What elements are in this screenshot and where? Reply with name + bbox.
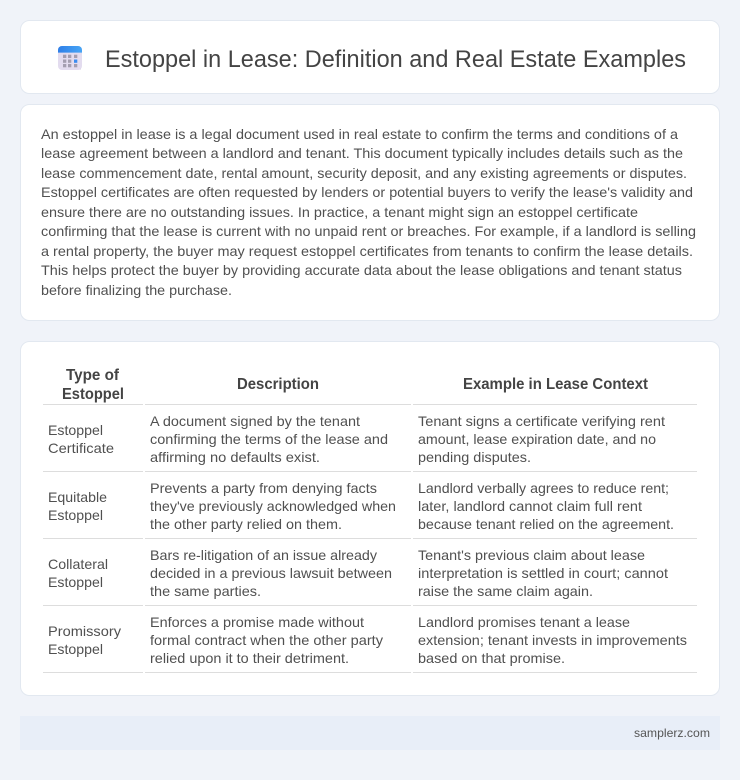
- table row: equitable estoppel: they've previously acknowledged when: [150, 498, 396, 514]
- table row: collateral estoppel: Tenant's previous claim about lease: [418, 547, 645, 563]
- table row: equitable estoppel: Prevents a party from denying facts: [150, 480, 377, 496]
- table row: collateral estoppel: decided in a previous lawsuit between: [150, 565, 392, 581]
- text block: paragraph: [41, 126, 696, 298]
- table row: equitable estoppel: later, landlord cannot claim full rent: [418, 498, 642, 514]
- text block: paragraph: lease commencement date, rental amount, security deposit, and any existing agreements or disputes.: [41, 165, 687, 181]
- table header: [62, 367, 649, 403]
- panel: estoppel types table: [20, 342, 720, 696]
- icon: calendar: [58, 46, 82, 70]
- table header: Type of: [66, 367, 120, 384]
- text block: paragraph: before finalizing the purchase.: [41, 282, 232, 298]
- table row: equitable estoppel: Estoppel: [48, 507, 103, 523]
- table row: estoppel certificate: Estoppel: [48, 422, 103, 438]
- table row: collateral estoppel: the same parties.: [150, 583, 261, 599]
- table row: collateral estoppel: Bars re-litigation of an issue already: [150, 547, 377, 563]
- text block: paragraph: ensure there are no outstanding issues. In practice, a tenant might sign an estoppel certificate: [41, 204, 638, 220]
- table row: promissory estoppel: [48, 614, 687, 666]
- table header: Description: [237, 376, 319, 393]
- table row: promissory estoppel: Enforces a promise made without: [150, 614, 364, 630]
- table row: equitable estoppel: because tenant relied on the agreement.: [418, 516, 674, 532]
- table row: collateral estoppel: [48, 547, 668, 599]
- text block: paragraph: This helps protect the buyer by providing accurate data about the lease obligations and tenant status: [41, 262, 682, 278]
- table header: Estoppel: [62, 386, 124, 403]
- table row: equitable estoppel: [48, 480, 674, 532]
- table row: collateral estoppel: Estoppel: [48, 574, 103, 590]
- table row: collateral estoppel: Collateral: [48, 556, 108, 572]
- table row: estoppel certificate: pending disputes.: [418, 449, 531, 465]
- table row: promissory estoppel: Estoppel: [48, 641, 103, 657]
- title: Estoppel in Lease: Definition and Real Estate Examples: [105, 46, 686, 73]
- panel: definition paragraph: [20, 104, 720, 320]
- table row: estoppel certificate: affirming no defaults exist.: [150, 449, 320, 465]
- text block: paragraph: confirming that the lease is current with no unpaid rent or breaches. For example, if a landlord is selling: [41, 223, 696, 239]
- table row: promissory estoppel: Landlord promises tenant a lease: [418, 614, 630, 630]
- panel: title card: [20, 20, 720, 94]
- table row: promissory estoppel: based on that promise.: [418, 650, 565, 666]
- table row: equitable estoppel: Landlord verbally agrees to reduce rent;: [418, 480, 669, 496]
- table row: promissory estoppel: Promissory: [48, 623, 121, 639]
- table row: estoppel certificate: Certificate: [48, 440, 114, 456]
- text block: paragraph: Estoppel certificates are often requested by lenders or potential buyers to verify the lease's validity and: [41, 184, 693, 200]
- table row: estoppel certificate: A document signed by the tenant: [150, 413, 360, 429]
- table header: Example in Lease Context: [463, 376, 649, 393]
- table row: promissory estoppel: relied upon it to their detriment.: [150, 650, 349, 666]
- table row: collateral estoppel: interpretation is settled in court; cannot: [418, 565, 668, 581]
- text block: paragraph: a rental property, the buyer may request estoppel certificates from tenants to confirm the lease details.: [41, 243, 693, 259]
- table row: promissory estoppel: formal contract when the other party: [150, 632, 383, 648]
- table row: equitable estoppel: Equitable: [48, 489, 107, 505]
- table row: estoppel certificate: [48, 413, 665, 465]
- table row: equitable estoppel: the other party relied on them.: [150, 516, 342, 532]
- table row: estoppel certificate: amount, lease expiration date, and no: [418, 431, 656, 447]
- footer credit: samplerz.com: [634, 726, 710, 740]
- footer bar: [20, 716, 720, 750]
- table row: estoppel certificate: Tenant signs a certificate verifying rent: [418, 413, 665, 429]
- table row: promissory estoppel: extension; tenant invests in improvements: [418, 632, 687, 648]
- text block: paragraph: lease agreement between a landlord and tenant. This document typically includes details such as the: [41, 145, 683, 161]
- table row: collateral estoppel: raise the same claim again.: [418, 583, 593, 599]
- table row: estoppel certificate: confirming the terms of the lease and: [150, 431, 388, 447]
- text block: paragraph: An estoppel in lease is a legal document used in real estate to confirm the terms and conditions of a: [41, 126, 678, 142]
